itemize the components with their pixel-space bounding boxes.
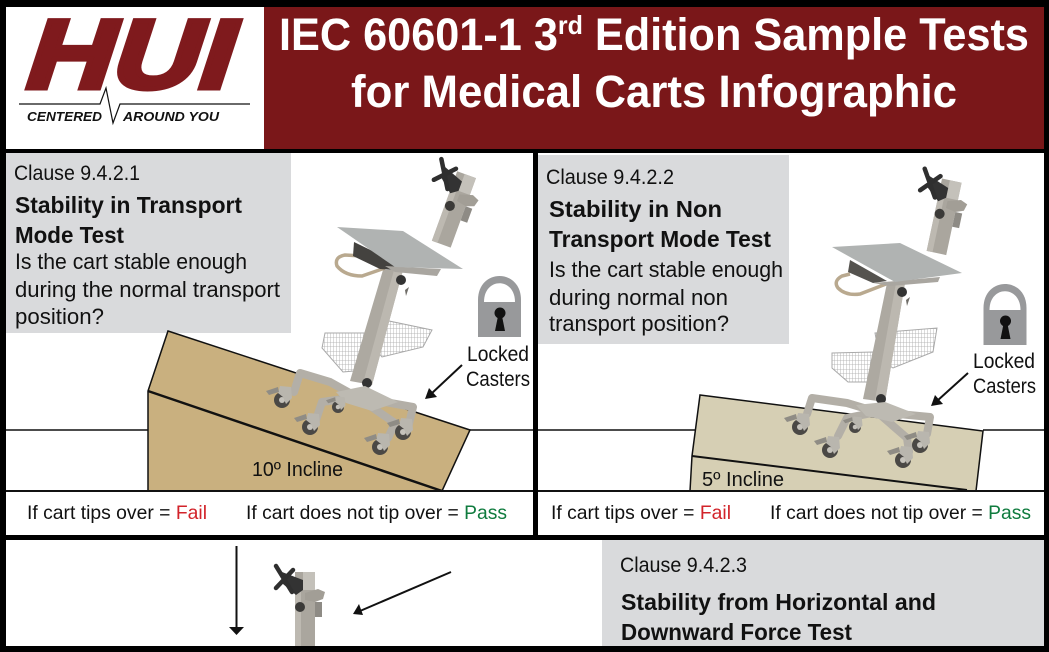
locked casters label (466, 343, 530, 391)
cart on 10 degree incline (266, 159, 487, 455)
arrow to casters (931, 373, 968, 406)
panel: clause 9.4.2.3 (6, 540, 1044, 646)
incline label: 5º Incline (702, 469, 784, 491)
logo pulse line (19, 88, 250, 123)
title banner (264, 7, 1044, 149)
pass fail criteria: If cart does not tip over = Pass (246, 502, 507, 524)
ground lines (6, 429, 533, 431)
panel: clause 9.4.2.1 (6, 153, 533, 535)
description box: Downward Force Test (621, 619, 852, 645)
logo tagline (27, 110, 220, 124)
description box: position? (15, 304, 104, 329)
logo wordmark: HUI (13, 0, 255, 109)
pass fail criteria: If cart tips over = Fail (551, 502, 731, 524)
ramp: 10 degree (148, 331, 470, 491)
description box: Stability in Transport (15, 192, 242, 218)
locked casters label: Locked (973, 350, 1035, 373)
title text: Edition Sample Tests (583, 9, 1029, 60)
title text (279, 9, 1029, 117)
icon: padlock (984, 284, 1026, 345)
description box (602, 540, 1044, 646)
locked casters label: Casters (973, 375, 1036, 398)
logo tagline: AROUND YOU (122, 110, 220, 124)
icon: padlock (478, 276, 521, 337)
description box: Clause 9.4.2.3 (620, 554, 747, 577)
locked casters label (973, 350, 1036, 398)
pass fail criteria (27, 502, 507, 524)
locked casters label: Casters (466, 368, 530, 391)
panel: clause 9.4.2.2 (538, 153, 1044, 535)
description box: Is the cart stable enough (15, 249, 247, 274)
description box: transport position? (549, 311, 729, 336)
pass fail criteria: If cart tips over = Fail (27, 502, 207, 524)
logo tagline: CENTERED (27, 110, 102, 124)
locked casters label: Locked (467, 343, 529, 366)
title text: rd (558, 10, 583, 40)
logo panel (6, 0, 264, 149)
arrow to casters (425, 365, 462, 399)
description box: Mode Test (15, 222, 124, 248)
description box: Is the cart stable enough (549, 257, 783, 282)
description box: Clause 9.4.2.1 (14, 162, 140, 185)
pass fail criteria: If cart does not tip over = Pass (770, 502, 1031, 524)
ground lines (538, 429, 1044, 431)
title text: IEC 60601-1 3 (279, 9, 569, 60)
incline label: 10º Incline (252, 459, 343, 481)
description box: Stability from Horizontal and (621, 589, 936, 615)
description box (538, 155, 789, 344)
arrow: downward force (229, 546, 244, 635)
description box: during the normal transport (15, 277, 281, 302)
description box: Transport Mode Test (549, 226, 771, 252)
pass fail criteria (551, 502, 1031, 524)
description box: Stability in Non (549, 196, 722, 222)
ramp: 5 degree (690, 395, 983, 491)
cart on 5 degree incline (784, 169, 973, 468)
arrow: horizontal force (353, 572, 451, 615)
description box: during normal non (549, 285, 728, 310)
title text: for Medical Carts Infographic (351, 66, 957, 117)
description box (6, 153, 291, 333)
description box: Clause 9.4.2.2 (546, 166, 674, 189)
cart top section (276, 566, 325, 646)
